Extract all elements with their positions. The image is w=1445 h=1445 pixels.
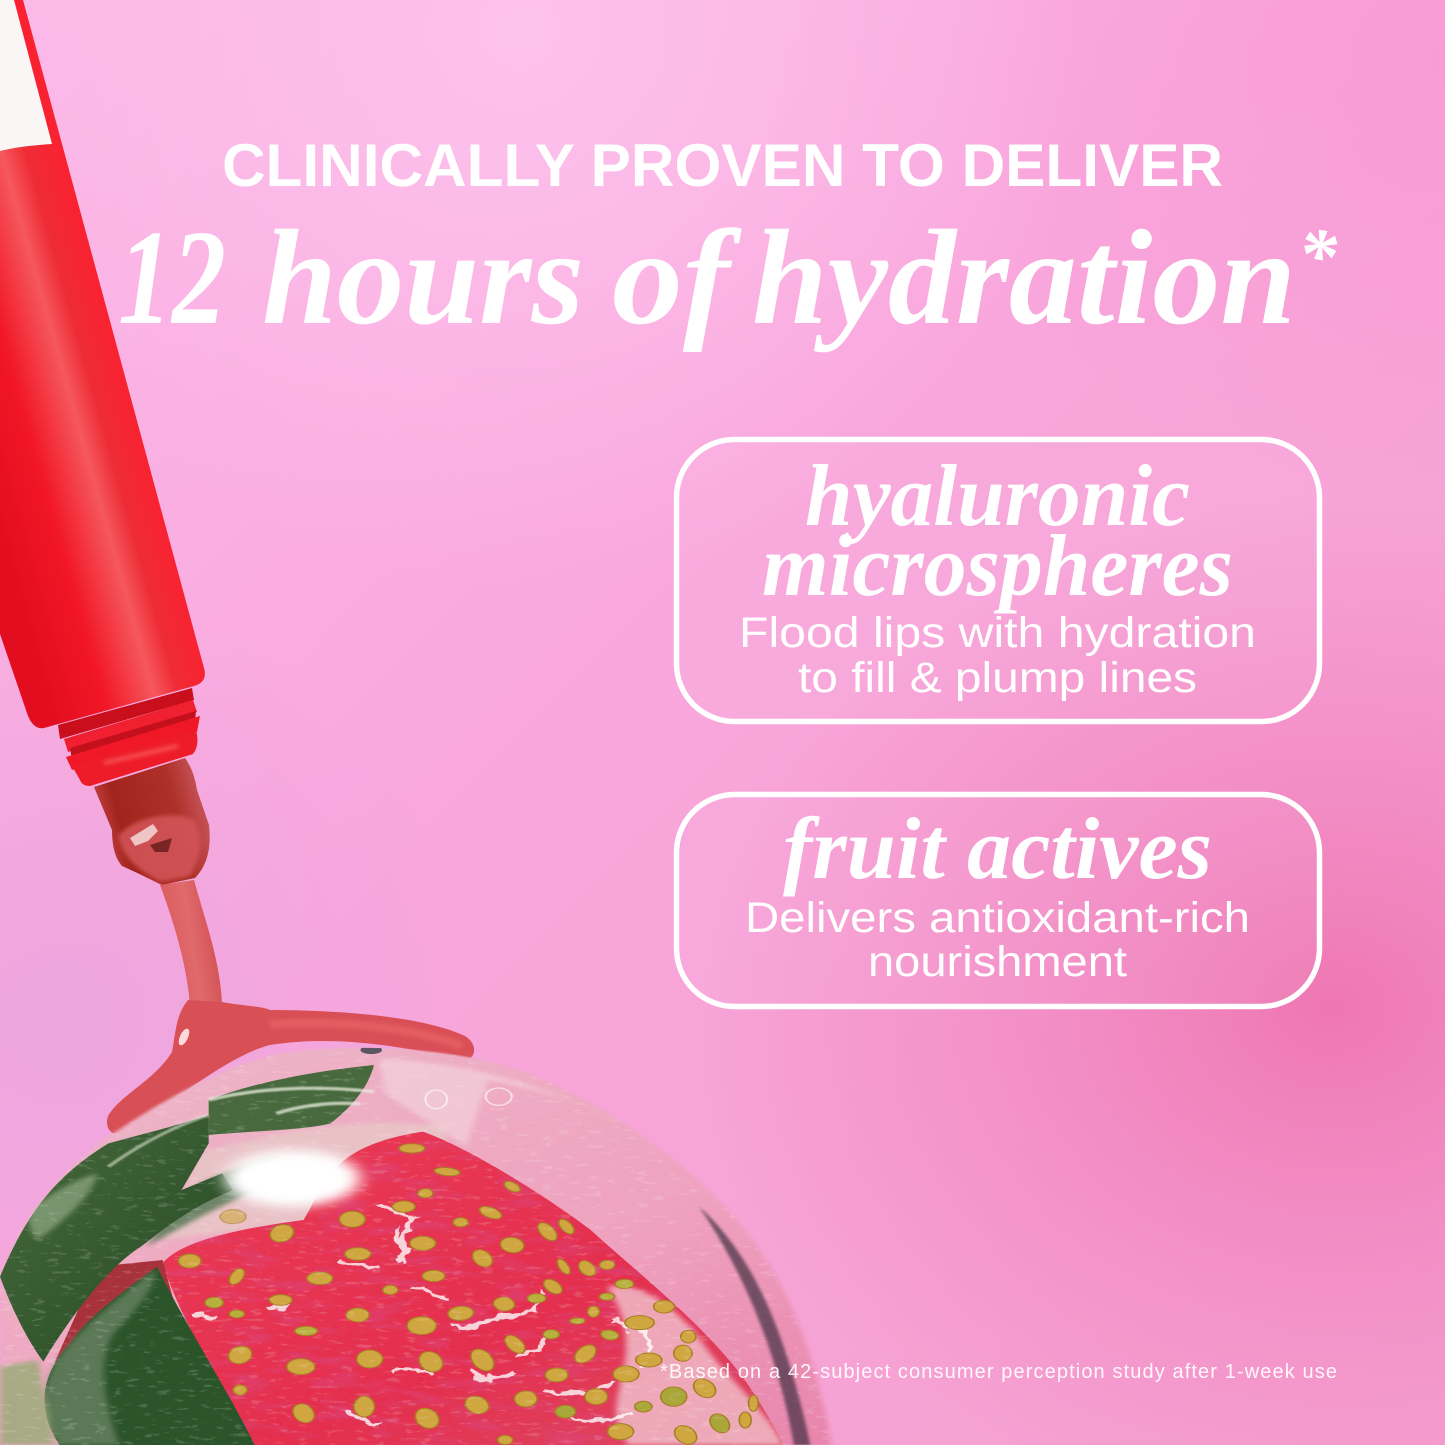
haze behind strawberry top: [163, 1123, 455, 1240]
frost streaks: [195, 1207, 651, 1427]
strawberry seeds: [178, 1144, 758, 1445]
word hydration: hydration: [752, 203, 1296, 353]
water globe with strawberry (zoom-space coordinates): [0, 1040, 840, 1445]
collar highlight: [104, 746, 178, 763]
gel glint: [177, 1027, 191, 1047]
main calyx leaf: [0, 1115, 233, 1362]
dark right edge reflection: [699, 1207, 810, 1445]
frost speckle over glass: [0, 1040, 840, 1445]
frost on lower leaf: [45, 1270, 155, 1445]
word of: of: [612, 203, 742, 353]
darker mottling: [163, 1130, 786, 1445]
strawberry body: [163, 1132, 783, 1445]
panel: hyaluronic microspheres: [676, 440, 1320, 722]
panel title line 1: hyaluronic: [805, 448, 1190, 545]
panel outline: [676, 440, 1320, 722]
panel title: fruit actives: [783, 801, 1212, 898]
panel body line 2: nourishment: [868, 938, 1127, 986]
nozzle white glint: [130, 824, 158, 846]
word hours: hours: [262, 203, 584, 353]
nozzle threads: [58, 688, 200, 770]
dark glint: [150, 838, 172, 852]
heading line: clinically proven: CLINICALLY PROVEN TO DELIVER: [222, 132, 1223, 199]
glare on main leaf: [108, 1115, 209, 1167]
gel highlight: [270, 1023, 462, 1046]
frost patch on leaf: [29, 1173, 98, 1240]
lower calyx leaf: [45, 1267, 255, 1445]
footnote: *Based on a 42-subject consumer perception study after 1-week use: [660, 1361, 1337, 1383]
panel body line 1: Flood lips with hydration: [739, 609, 1256, 657]
clear nozzle with gel: [94, 758, 210, 885]
bubbles: [425, 1088, 512, 1109]
heading line: 12 hours of hydration: [118, 203, 1296, 353]
frost pale region on strawberry: [607, 1286, 783, 1445]
white tube label: [0, 0, 52, 151]
base stem frost: [0, 1360, 54, 1445]
nozzle collar: [72, 730, 197, 786]
asterisk: *: [1298, 212, 1338, 299]
red lip product tube: [0, 0, 210, 885]
gel puddle and drip: [107, 1000, 474, 1134]
upper calyx leaf: [209, 1065, 374, 1135]
glass rim highlight: [379, 1058, 554, 1146]
strawberry texture: [163, 1130, 786, 1445]
panel body line 2: to fill & plump lines: [798, 654, 1197, 702]
number 12: 12: [118, 203, 226, 353]
glass dome: [0, 1048, 832, 1445]
panel title line 2: microspheres: [762, 518, 1233, 615]
white blurred highlight: [225, 1150, 360, 1207]
panel body line 1: Delivers antioxidant-rich: [745, 894, 1250, 942]
panel outline: [676, 794, 1320, 1006]
dark bubble: [360, 1048, 382, 1054]
glare streak on leaf: [209, 1088, 374, 1113]
tube body: [0, 0, 205, 728]
nozzle reflection: [118, 815, 200, 882]
gel stream: [107, 880, 474, 1134]
panel: fruit actives: [676, 794, 1320, 1006]
red gap between leaves: [54, 1260, 173, 1363]
grey-green leaf under haze: [144, 1164, 249, 1248]
